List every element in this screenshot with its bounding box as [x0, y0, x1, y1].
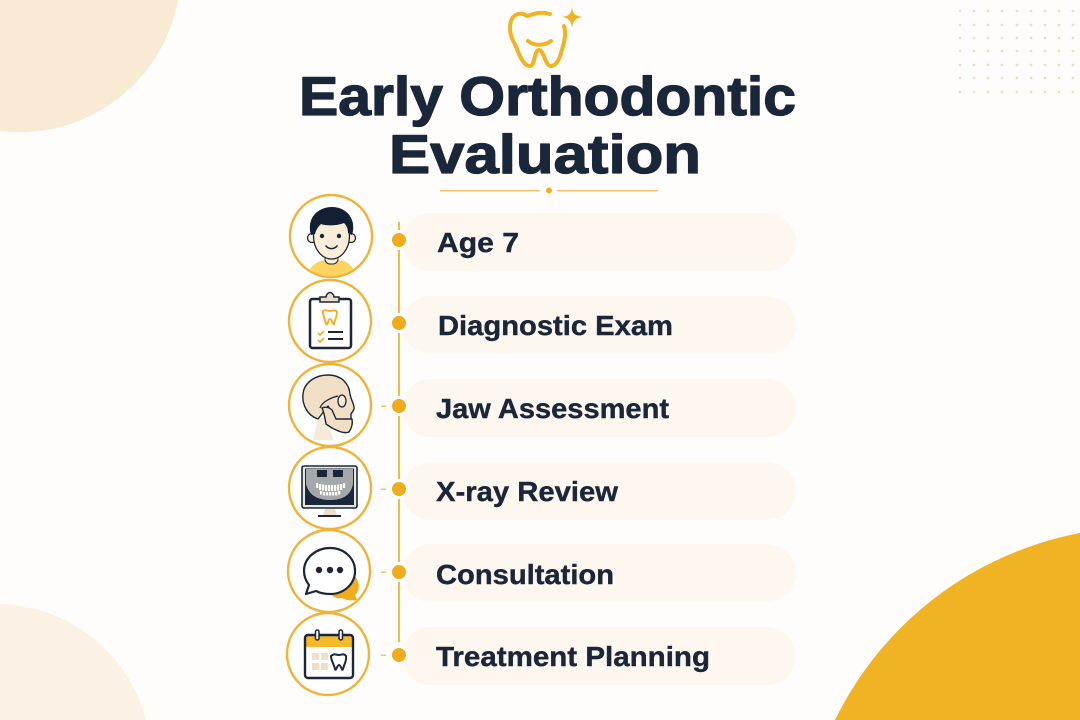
step 5 label: Consultation [436, 559, 614, 590]
step 2 label: Diagnostic Exam [438, 310, 673, 341]
title [299, 65, 796, 185]
dot grid: top right [959, 10, 1074, 93]
step 4 node [390, 480, 408, 498]
step 5 pill [402, 544, 796, 602]
step 5 connector [381, 572, 386, 573]
title: Evaluation [389, 123, 701, 185]
step 6 connector [381, 654, 386, 656]
title divider [440, 188, 658, 194]
title: Early Orthodontic [299, 65, 796, 127]
step 6: treatment planning [287, 613, 796, 695]
step 6 icon: calendar [287, 613, 369, 695]
step 3 icon: skull [289, 364, 371, 446]
step 1 pill [402, 213, 796, 271]
step 3 pill [402, 379, 796, 437]
step 4 icon: x-ray monitor [289, 447, 371, 529]
step 3: jaw assessment [289, 364, 796, 446]
step 4 pill [402, 462, 796, 520]
step 2 icon: clipboard [289, 280, 371, 362]
decorative blob: bottom right [835, 533, 1080, 720]
step 3 label: Jaw Assessment [436, 393, 669, 424]
step 4 label: X-ray Review [436, 476, 618, 507]
step 1 label: Age 7 [437, 227, 519, 258]
step 6 pill [402, 627, 796, 685]
step 2: diagnostic exam [289, 280, 796, 362]
timeline line [398, 222, 400, 642]
step 2 node [390, 314, 408, 332]
step 6 node [390, 646, 408, 664]
step 1 node [390, 232, 408, 248]
step 5 icon: speech bubbles [288, 530, 370, 612]
step 2 pill [402, 296, 796, 354]
step 4 connector [381, 488, 386, 490]
decorative blob: bottom left [0, 604, 146, 720]
step 1: age 7 [290, 195, 796, 278]
step 3 connector [381, 406, 386, 407]
step 1 icon: child [290, 195, 372, 278]
step 4: x-ray review [289, 447, 796, 529]
icon: tooth with sparkle [510, 7, 583, 66]
decorative blob: top left [0, 0, 178, 132]
step 6 label: Treatment Planning [436, 641, 710, 672]
step 3 node [390, 398, 408, 414]
step 5 node [390, 564, 408, 580]
step 5: consultation [288, 530, 796, 612]
